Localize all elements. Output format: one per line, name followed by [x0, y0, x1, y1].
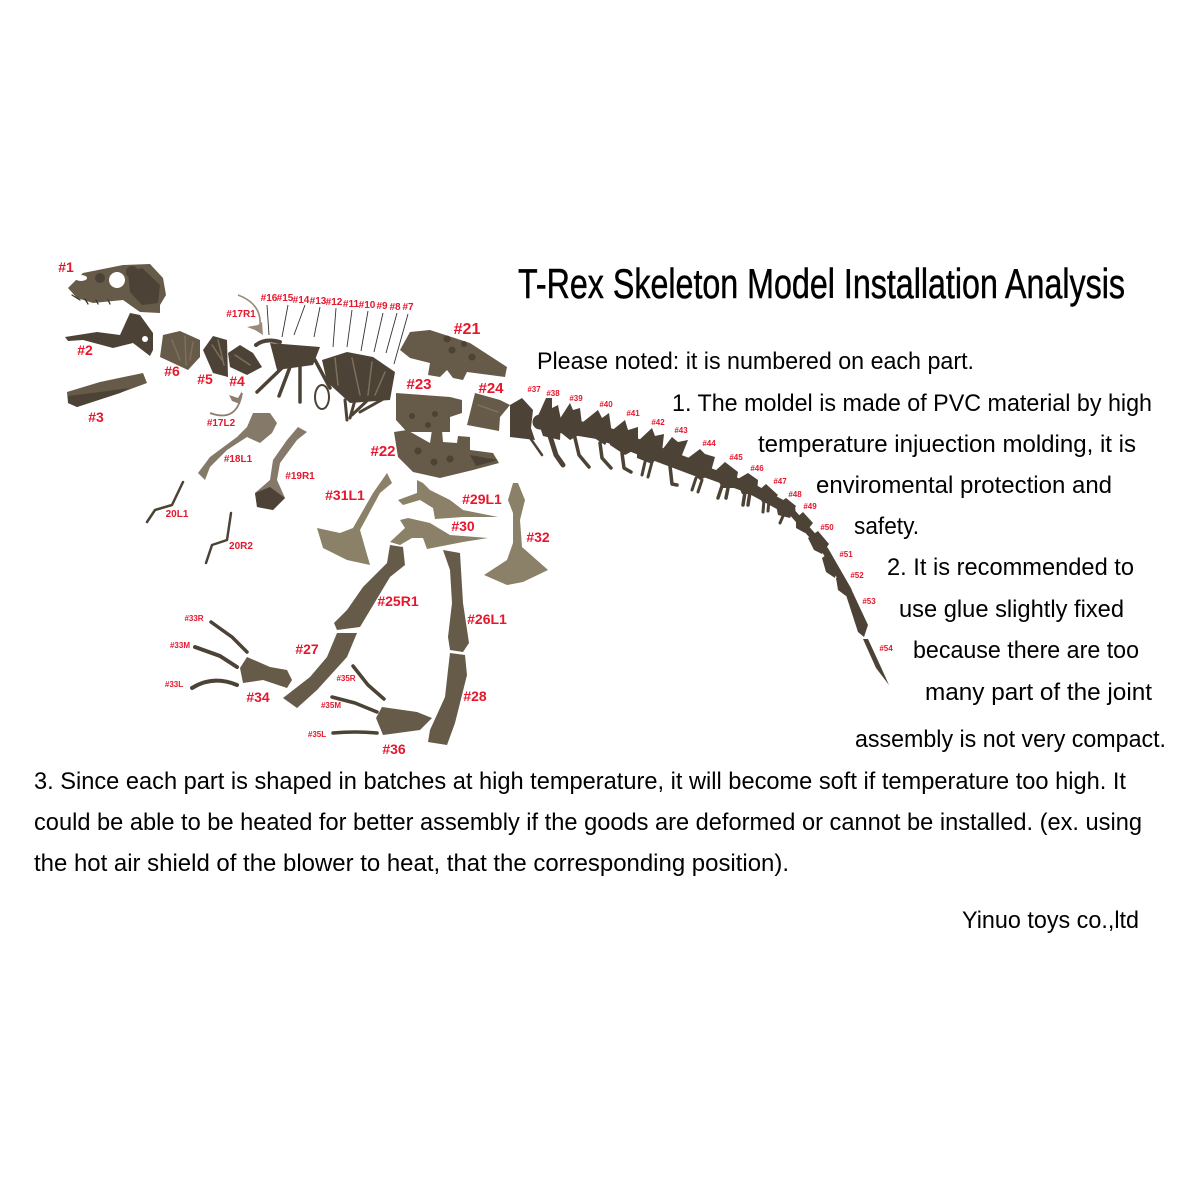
- part #17L2: rib: #17L2: [207, 418, 236, 429]
- vertebra #46: [736, 464, 764, 505]
- parts #7 to #16: rib cage with pointer lines: #13: [310, 296, 327, 307]
- part #29L1: hip blade: #29L1: [462, 491, 502, 507]
- parts #7 to #16: rib cage with pointer lines: #14: [293, 295, 310, 306]
- part #33R: toe: #33R: [184, 614, 204, 623]
- parts #7 to #16: rib cage with pointer lines: #9: [376, 301, 388, 312]
- vertebra #37: [510, 385, 542, 455]
- part #31L1: hip blade: [317, 473, 392, 565]
- part #23: sacrum: #23: [406, 376, 432, 393]
- part #22: pelvis plate: [370, 430, 499, 478]
- part #34: foot: [240, 657, 292, 705]
- part #33M: toe: #33M: [170, 641, 190, 650]
- vertebra #48: [776, 490, 802, 523]
- vertebra #54: [863, 639, 893, 685]
- vertebra #38: #38: [546, 389, 560, 398]
- tail backbone: [540, 422, 700, 470]
- part #35L: toe: [308, 730, 377, 739]
- part #22: pelvis plate: #22: [370, 443, 396, 460]
- text block: installation notes: safety.: [854, 513, 919, 540]
- part #25R1: femur: [334, 545, 419, 630]
- vertebra #51: #51: [839, 550, 853, 559]
- part #21: pelvis plate: #21: [454, 321, 480, 338]
- part #28: lower leg: #28: [463, 688, 487, 704]
- vertebra #39: #39: [569, 394, 583, 403]
- part #24: sacrum: [467, 380, 510, 431]
- part #17L2: rib: [207, 391, 242, 429]
- part #30: hip blade: #30: [451, 518, 475, 534]
- vertebra #41: [610, 409, 640, 472]
- part #3: lower jaw: [67, 373, 147, 425]
- part #36: foot: [376, 707, 432, 757]
- parts #7 to #16: rib cage with pointer lines: #10: [359, 300, 376, 311]
- part #1: skull: #1: [58, 259, 74, 275]
- vertebra #40: #40: [599, 400, 613, 409]
- tail backbone end: [790, 510, 862, 625]
- part 20L1: claw: 20L1: [166, 509, 189, 520]
- part 20R2: claw: 20R2: [229, 541, 253, 552]
- part #33L: toe: [165, 680, 237, 689]
- part #35R: toe: [336, 666, 384, 699]
- text block: installation notes: [34, 348, 1166, 877]
- part #21: pelvis plate: [400, 321, 507, 380]
- part 20L1: claw: [147, 482, 189, 522]
- part #6: neck vertebra: [160, 331, 200, 379]
- vertebra #46: #46: [750, 464, 764, 473]
- part #4: neck vertebra: #4: [229, 373, 245, 389]
- part #35M: toe: [321, 697, 377, 712]
- vertebra #48: #48: [788, 490, 802, 499]
- text block: installation notes: 2. It is recommended to: [887, 554, 1134, 581]
- part #35M: toe: #35M: [321, 701, 341, 710]
- part #29L1: hip blade: [398, 480, 502, 519]
- vertebra #43: [662, 426, 688, 485]
- text block: installation notes: many part of the joint: [925, 679, 1152, 706]
- part #30: hip blade: [390, 518, 488, 549]
- part #31L1: hip blade: #31L1: [325, 487, 365, 503]
- tail vertebrae #37 to #54: [510, 385, 893, 685]
- part #1: skull: [58, 259, 166, 313]
- parts #7 to #16: rib cage with pointer lines: #11: [343, 299, 360, 310]
- vertebra #44: #44: [702, 439, 716, 448]
- part #5: neck vertebra: [197, 336, 228, 387]
- vertebra #39: [559, 394, 589, 467]
- part #23: sacrum: [396, 376, 462, 432]
- part #19R1: arm bone: #19R1: [285, 471, 315, 482]
- part #28: lower leg: [428, 653, 487, 745]
- vertebra #45: [714, 453, 743, 498]
- parts #7 to #16: rib cage with pointer lines: #16: [261, 293, 278, 304]
- vertebra #42: #42: [651, 418, 665, 427]
- part #32: hip blade: #32: [526, 529, 550, 545]
- vertebra #40: [583, 400, 613, 468]
- part #32: hip blade: [484, 483, 550, 585]
- vertebra #42: [637, 418, 665, 477]
- part #27: lower leg: #27: [295, 641, 319, 657]
- vertebra #37: #37: [527, 385, 541, 394]
- part #27: lower leg: [283, 633, 357, 708]
- part #26L1: femur: [443, 550, 507, 652]
- vertebra #47: #47: [773, 477, 787, 486]
- text block: installation notes: 3. Since each part is shaped in batches at high temperature, it will become soft if temperature too high. It: [34, 768, 1126, 795]
- vertebra #49: #49: [803, 502, 817, 511]
- vertebra #43: #43: [674, 426, 688, 435]
- vertebra #44: [686, 439, 716, 492]
- part #19R1: arm bone: [255, 427, 315, 510]
- text block: installation notes: could be able to be heated for better assembly if the goods are deformed or cannot be installed. (ex. using: [34, 809, 1142, 836]
- part #4: neck vertebra: [228, 345, 262, 389]
- part #18L1: arm bone: #18L1: [224, 454, 253, 465]
- part #35R: toe: #35R: [336, 674, 356, 683]
- parts #7 to #16: rib cage with pointer lines: #12: [326, 297, 343, 308]
- parts #7 to #16: rib cage with pointer lines: #8: [389, 302, 401, 313]
- part #6: neck vertebra: #6: [164, 363, 180, 379]
- vertebra #50: [808, 523, 834, 554]
- parts #7 to #16: rib cage with pointer lines: #7: [402, 302, 414, 313]
- vertebra #45: #45: [729, 453, 743, 462]
- text block: installation notes: the hot air shield of the blower to heat, that the corresponding position).: [34, 850, 789, 877]
- text block: installation notes: 1. The moldel is made of PVC material by high: [672, 390, 1152, 417]
- parts #7 to #16: rib cage with pointer lines: [256, 293, 414, 420]
- part #18L1: arm bone: [198, 413, 277, 480]
- part 20R2: claw: [206, 513, 253, 563]
- vertebra #49: [796, 502, 817, 533]
- vertebra #54: #54: [879, 644, 893, 653]
- part #34: foot: #34: [246, 689, 270, 705]
- tail backbone middle: [700, 470, 790, 510]
- vertebra #53: #53: [862, 597, 876, 606]
- text block: installation notes: enviromental protection and: [816, 472, 1112, 499]
- part #26L1: femur: #26L1: [467, 611, 507, 627]
- text block: installation notes: temperature injuection molding, it is: [758, 431, 1136, 458]
- vertebra #47: [757, 477, 787, 512]
- part #33L: toe: #33L: [165, 680, 183, 689]
- vertebra #38: [537, 389, 563, 465]
- part #3: lower jaw: #3: [88, 409, 104, 425]
- signature: Yinuo toys co.,ltd: [962, 907, 1139, 934]
- text block: installation notes: use glue slightly fixed: [899, 596, 1124, 623]
- text block: installation notes: Please noted: it is numbered on each part.: [537, 348, 974, 375]
- part #2: lower skull: #2: [77, 342, 93, 358]
- vertebra #52: [836, 571, 864, 596]
- vertebra #51: [822, 550, 853, 578]
- part #2: lower skull: [65, 313, 153, 358]
- vertebra #53: [846, 593, 876, 637]
- text block: installation notes: because there are too: [913, 637, 1139, 664]
- part #5: neck vertebra: #5: [197, 371, 213, 387]
- part #25R1: femur: #25R1: [377, 593, 419, 609]
- text block: installation notes: assembly is not very compact.: [855, 726, 1166, 753]
- part #33R: toe: [184, 614, 247, 652]
- part #36: foot: #36: [382, 741, 406, 757]
- part #33M: toe: [170, 641, 237, 667]
- parts #7 to #16: rib cage with pointer lines: #15: [277, 293, 294, 304]
- vertebra #41: #41: [626, 409, 640, 418]
- vertebra #52: #52: [850, 571, 864, 580]
- part #17R1: rib: #17R1: [226, 309, 256, 320]
- part #24: sacrum: #24: [478, 380, 504, 397]
- part #35L: toe: #35L: [308, 730, 326, 739]
- part #17R1: rib: [226, 295, 263, 335]
- vertebra #50: #50: [820, 523, 834, 532]
